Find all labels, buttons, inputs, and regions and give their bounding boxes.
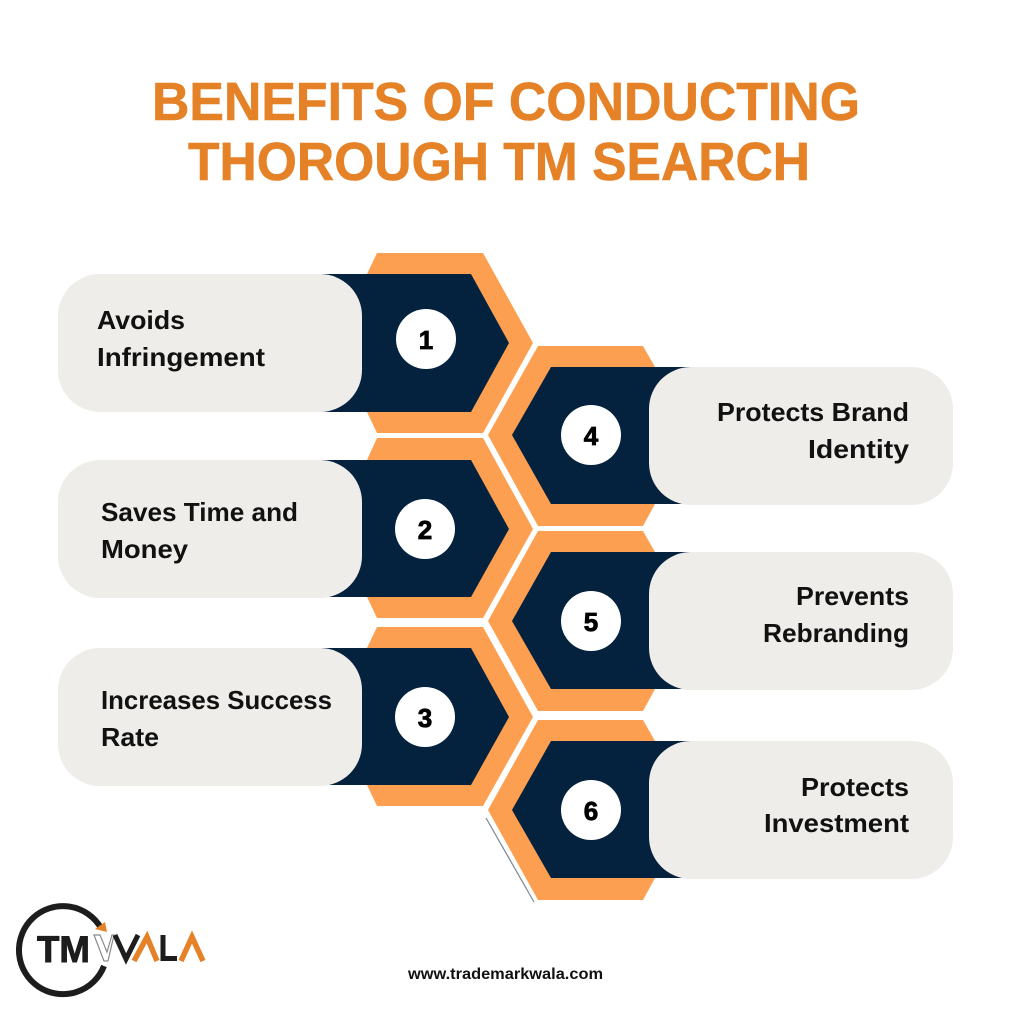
panel: benefit 3: Increases Success (101, 685, 332, 715)
panel: benefit 4: Protects Brand (717, 397, 909, 427)
panel: benefit 3: Rate (101, 722, 159, 752)
panel: benefit 2 (58, 438, 533, 618)
panel: benefit 3: 3 (418, 703, 432, 733)
panel: benefit 1: Infringement (97, 342, 265, 372)
panel: benefit 6: Investment (764, 808, 909, 838)
panel: benefit 5 (488, 531, 953, 711)
panel: benefit 1: 1 (419, 325, 433, 355)
panel: benefit 1: Avoids (97, 305, 185, 335)
website url: www.trademarkwala.com (407, 966, 603, 983)
panel: benefit 1 (58, 253, 533, 433)
panel: benefit 2: Money (101, 534, 189, 564)
panel: benefit 6: Protects (801, 772, 909, 802)
panel: benefit 6: 6 (584, 796, 598, 826)
panel: benefit 6 (486, 720, 953, 902)
panel: benefit 4: 4 (584, 421, 599, 451)
panel: benefit 5: Rebranding (763, 618, 909, 648)
logo: TM Wala (19, 906, 203, 994)
title: BENEFITS OF CONDUCTING (152, 72, 860, 132)
logo: TM Wala: TM (37, 929, 90, 970)
panel: benefit 5: Prevents (796, 581, 909, 611)
panel: benefit 2: 2 (418, 515, 432, 545)
panel: benefit 4 (488, 346, 953, 526)
panel: benefit 4: Identity (808, 434, 910, 464)
title (152, 72, 860, 192)
panel: benefit 3 (58, 627, 533, 806)
panel: benefit 2: Saves Time and (101, 497, 298, 527)
title: THOROUGH TM SEARCH (188, 132, 810, 192)
panel: benefit 5: 5 (584, 607, 598, 637)
